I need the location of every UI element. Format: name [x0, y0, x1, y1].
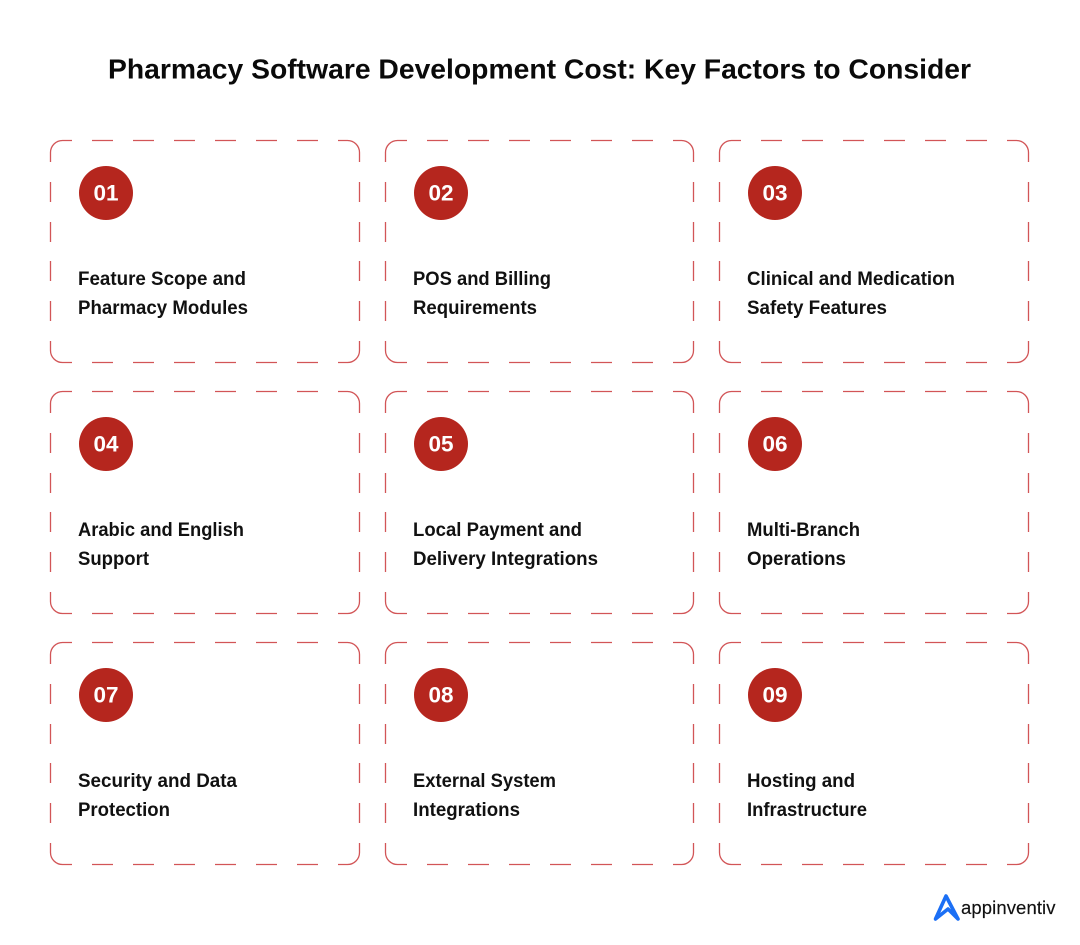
label: pos and billing: POS and Billing [413, 269, 551, 290]
label: security and data protection: Security and Data [78, 771, 237, 792]
panel: 01 feature scope [50, 140, 360, 362]
badge: 08: 08 [428, 682, 454, 708]
label: multi-branch operations: Multi-Branch [747, 520, 860, 541]
badge: 04 [79, 417, 133, 471]
label: arabic and english: Arabic and English [78, 520, 244, 541]
badge: 06: 06 [762, 432, 788, 456]
label: security and data protection [78, 771, 237, 821]
panel: 07 security and data protection [50, 642, 360, 864]
badge: 04: 04 [93, 432, 119, 456]
label: local payment and delivery: Delivery Integrations [413, 549, 598, 570]
logo: appinventiv [936, 896, 1056, 919]
badge: 02 [414, 166, 468, 220]
panel: 03 clinical and medication [720, 140, 1028, 362]
badge: 03: 03 [762, 180, 788, 206]
label: local payment and delivery: Local Payment and [413, 520, 582, 541]
logo wordmark: appinventiv [961, 897, 1056, 918]
label: multi-branch operations [747, 520, 860, 570]
badge: 01 [79, 166, 133, 220]
label: hosting and infrastructure: Infrastructure [747, 800, 867, 821]
badge: 05: 05 [428, 432, 454, 456]
label: external system integrations: Integrations [413, 800, 520, 821]
panel: 09 hosting and infrastructure [720, 642, 1028, 864]
badge: 01: 01 [93, 180, 119, 206]
badge: 02: 02 [428, 180, 454, 206]
panel: 08 external system integrations [386, 642, 694, 864]
icon: appinventiv arrow [936, 896, 958, 919]
badge: 06 [748, 417, 802, 471]
panel: 04 arabic and english [50, 392, 360, 614]
title: Pharmacy Software Development Cost: Key Factors to Consider [108, 54, 971, 84]
badge: 07: 07 [93, 682, 119, 708]
label: feature scope: Pharmacy Modules [78, 298, 248, 319]
label: arabic and english: Support [78, 549, 150, 570]
label: feature scope: Feature Scope and [78, 269, 246, 290]
label: pos and billing [413, 269, 551, 319]
label: arabic and english [78, 520, 244, 570]
badge: 08 [414, 668, 468, 722]
panel: 02 pos and billing [386, 140, 694, 362]
badge: 09 [748, 668, 802, 722]
label: external system integrations: External System [413, 771, 556, 792]
label: local payment and delivery [413, 520, 598, 570]
label: feature scope [78, 269, 248, 319]
label: clinical and medication: Safety Features [747, 298, 887, 319]
label: security and data protection: Protection [78, 800, 170, 821]
badge: 03 [748, 166, 802, 220]
label: multi-branch operations: Operations [747, 549, 846, 570]
label: external system integrations [413, 771, 556, 821]
label: hosting and infrastructure [747, 771, 867, 821]
badge: 05 [414, 417, 468, 471]
panel: 05 local payment and delivery [386, 392, 694, 614]
label: pos and billing: Requirements [413, 298, 537, 319]
badge: 09: 09 [762, 682, 788, 708]
panel: 06 multi-branch operations [720, 392, 1028, 614]
badge: 07 [79, 668, 133, 722]
label: clinical and medication: Clinical and Medication [747, 269, 955, 290]
label: clinical and medication [747, 269, 955, 319]
label: hosting and infrastructure: Hosting and [747, 771, 855, 792]
